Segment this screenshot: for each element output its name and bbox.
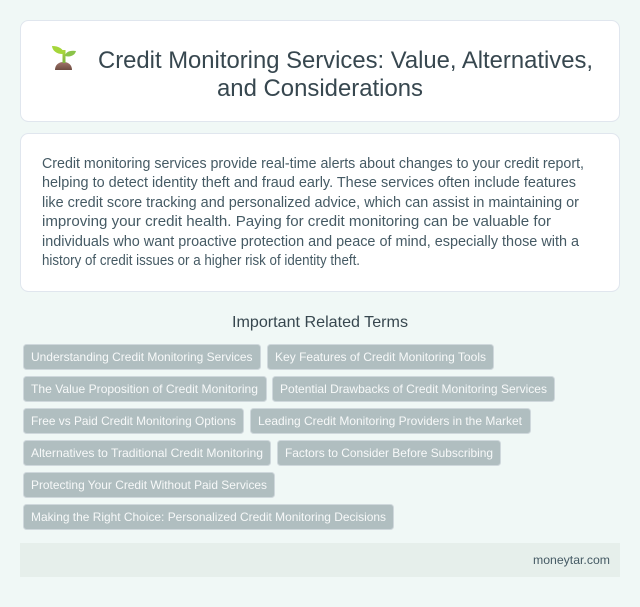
panel: summary text: improving your credit health. Paying for credit monitoring can be valuable for	[42, 213, 551, 230]
panel: related term tags: The Value Proposition of Credit Monitoring	[31, 382, 258, 396]
title: and Considerations	[217, 75, 423, 102]
panel: summary text: Credit monitoring services provide real-time alerts about changes to your credit report,	[42, 155, 584, 172]
title: Credit Monitoring Services: Value, Alternatives,	[98, 47, 593, 74]
panel: summary text: individuals who want proactive protection and peace of mind, especially those with a	[42, 233, 580, 250]
panel: title card	[20, 20, 620, 122]
panel: related term tags: Leading Credit Monitoring Providers in the Market	[258, 414, 523, 428]
panel: summary text: like credit score tracking and personalized advice, which can assist in maintaining or	[42, 194, 579, 211]
heading: important related terms: Important Related Terms	[232, 314, 408, 331]
panel: summary text: history of credit issues or a higher risk of identity theft.	[42, 252, 360, 269]
panel: related term tags: Protecting Your Credit Without Paid Services	[31, 478, 267, 492]
panel: related term tags: Potential Drawbacks of Credit Monitoring Services	[280, 382, 547, 396]
panel: related term tags: Free vs Paid Credit Monitoring Options	[31, 414, 236, 428]
panel: related term tags: Key Features of Credit Monitoring Tools	[275, 350, 486, 364]
panel: summary text	[20, 134, 620, 292]
footer	[20, 543, 620, 577]
panel: related term tags: Alternatives to Traditional Credit Monitoring	[31, 446, 263, 460]
panel: summary text: helping to detect identity theft and fraud early. These services often include features	[42, 174, 576, 191]
footer: moneytar.com	[533, 553, 610, 567]
panel: related term tags	[24, 344, 554, 530]
panel: related term tags: Making the Right Choice: Personalized Credit Monitoring Decisions	[31, 510, 386, 524]
panel: related term tags: Understanding Credit Monitoring Services	[31, 350, 252, 364]
icon: sprout	[52, 46, 76, 70]
panel: related term tags: Factors to Consider Before Subscribing	[285, 446, 493, 460]
title	[98, 47, 593, 102]
